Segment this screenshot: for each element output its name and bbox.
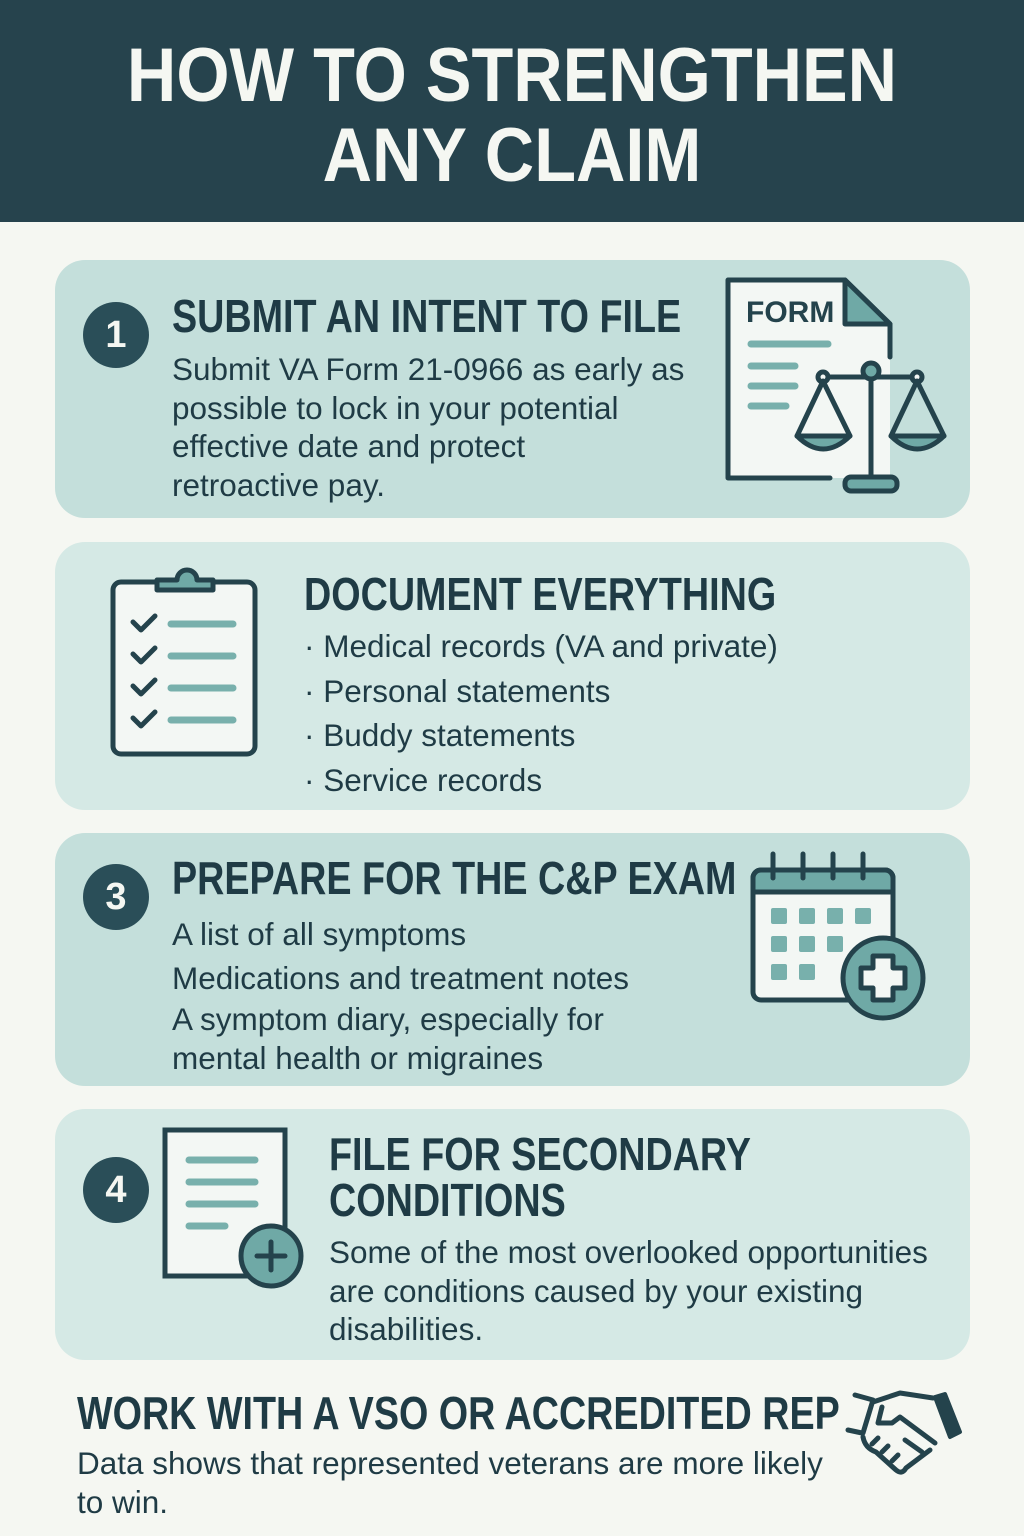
text 3: Medications and treatment notes bbox=[172, 960, 629, 996]
number 3: 3 bbox=[105, 876, 127, 918]
header banner bbox=[0, 0, 1024, 222]
number 1 bbox=[83, 302, 149, 368]
icon: form with scales bbox=[726, 278, 946, 494]
icon: form with scales: FORM bbox=[746, 296, 834, 329]
text 4 bbox=[329, 1234, 928, 1347]
text 3: A list of all symptoms bbox=[172, 916, 466, 952]
bullet list: · Personal statements bbox=[304, 672, 610, 708]
text 5 bbox=[77, 1445, 823, 1520]
text 5: Data shows that represented veterans are more likely bbox=[77, 1445, 823, 1481]
icon: clipboard checklist bbox=[110, 568, 258, 756]
bullet list: · Service records bbox=[304, 762, 542, 798]
text 1: possible to lock in your potential bbox=[172, 390, 619, 426]
icon: document with plus bbox=[162, 1128, 304, 1288]
heading 4 bbox=[329, 1128, 751, 1226]
panel: secondary conditions bbox=[55, 1109, 970, 1360]
text 1: Submit VA Form 21-0966 as early as bbox=[172, 351, 684, 387]
text 5: to win. bbox=[77, 1484, 168, 1520]
title: HOW TO STRENGTHEN bbox=[127, 33, 897, 118]
text 1: effective date and protect bbox=[172, 428, 525, 464]
icon: handshake bbox=[846, 1390, 962, 1475]
text 4: disabilities. bbox=[329, 1311, 483, 1347]
heading 4: FILE FOR SECONDARY bbox=[329, 1128, 751, 1180]
icon: calendar with plus bbox=[750, 852, 926, 1020]
number 3 bbox=[83, 864, 149, 930]
panel: intent to file bbox=[55, 260, 970, 518]
footer: work with VSO bbox=[77, 1387, 962, 1520]
bullet list bbox=[304, 628, 778, 798]
heading 3: PREPARE FOR THE C&P EXAM bbox=[172, 852, 736, 904]
number 4: 4 bbox=[105, 1169, 127, 1211]
heading 5: WORK WITH A VSO OR ACCREDITED REP bbox=[77, 1387, 840, 1439]
number 1: 1 bbox=[105, 314, 127, 356]
title bbox=[127, 33, 897, 198]
heading 4: CONDITIONS bbox=[329, 1174, 566, 1226]
number 4 bbox=[83, 1157, 149, 1223]
text 3: mental health or migraines bbox=[172, 1040, 543, 1076]
text 4: Some of the most overlooked opportunities bbox=[329, 1234, 928, 1270]
title: ANY CLAIM bbox=[323, 113, 701, 198]
bullet list: · Buddy statements bbox=[304, 717, 575, 753]
text 1: retroactive pay. bbox=[172, 466, 385, 502]
bullet list: · Medical records (VA and private) bbox=[304, 628, 778, 664]
text 3: A symptom diary, especially for bbox=[172, 1001, 604, 1037]
text 4: are conditions caused by your existing bbox=[329, 1272, 863, 1308]
panel: document everything bbox=[55, 542, 970, 810]
panel: C&P exam bbox=[55, 833, 970, 1086]
heading 1: SUBMIT AN INTENT TO FILE bbox=[172, 290, 681, 342]
text 3 bbox=[172, 916, 629, 1076]
heading 2: DOCUMENT EVERYTHING bbox=[304, 568, 776, 620]
text 1 bbox=[172, 351, 684, 502]
